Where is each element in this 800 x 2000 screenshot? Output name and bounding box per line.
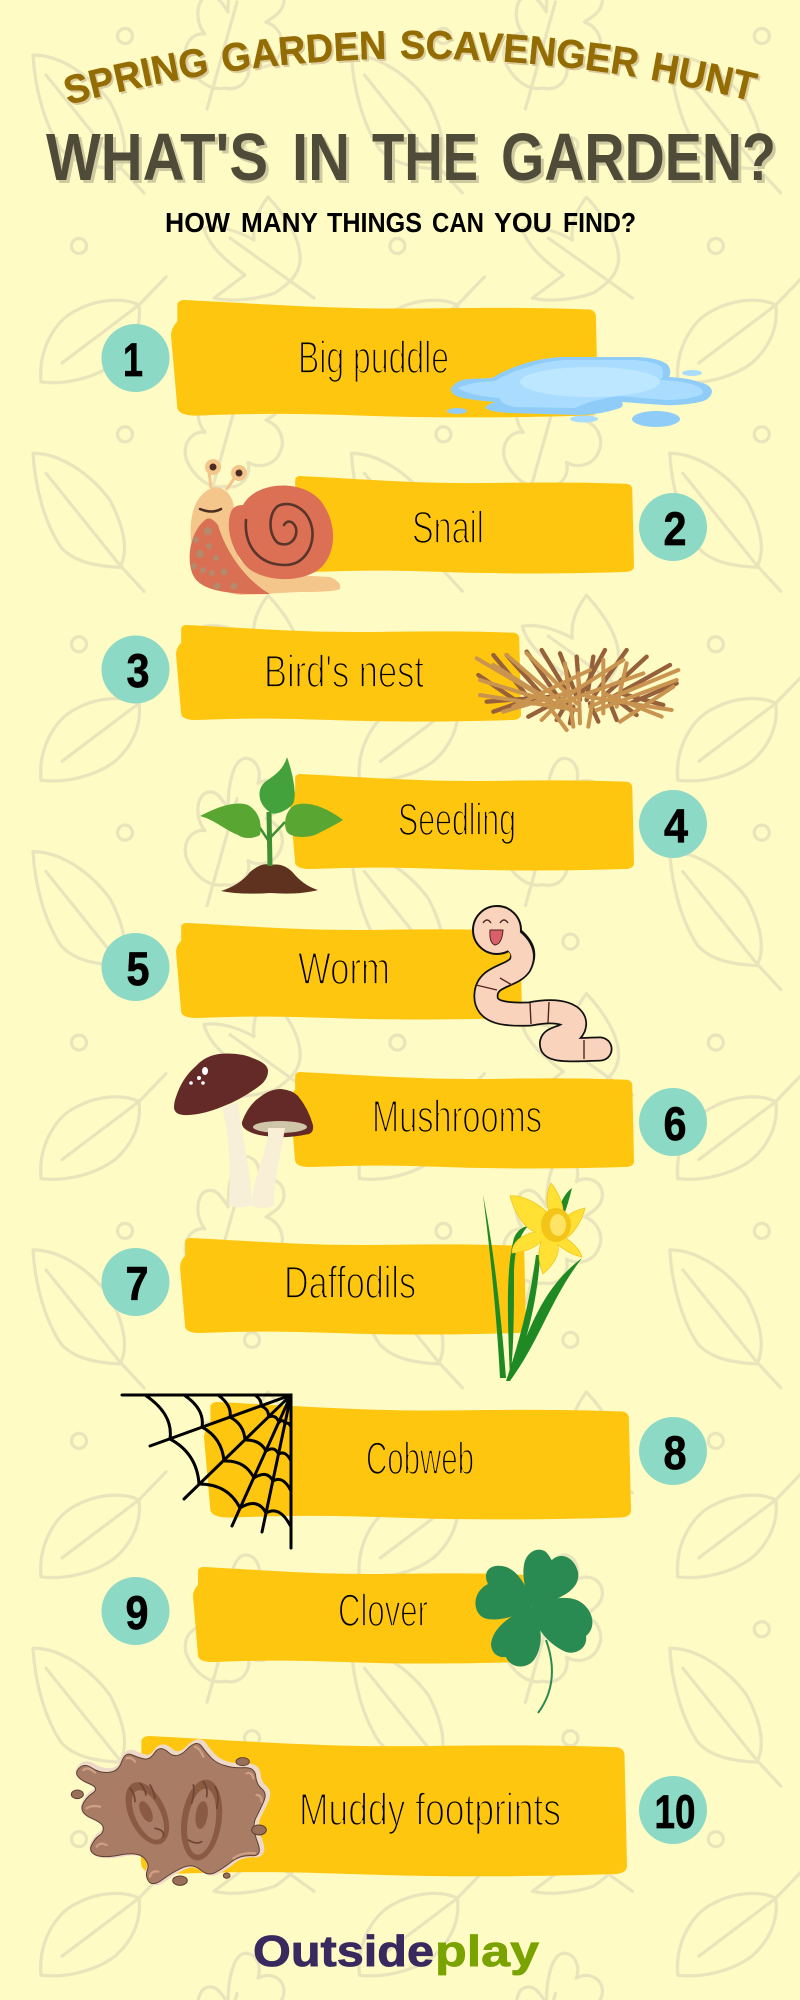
main heading [46,120,776,195]
number badge 2 [639,493,707,561]
number badge 10: 10 [654,1785,696,1838]
icon: mud with footprints [71,1742,267,1885]
label text: Seedling [398,794,516,845]
number badge 6 [639,1088,707,1156]
number badge 10 [639,1776,707,1844]
label text: Worm [298,943,390,994]
label bar [204,1402,631,1519]
label bar [134,1736,627,1876]
number badge 5: 5 [126,942,150,995]
label bar [193,1567,530,1664]
subheading [165,207,636,238]
label text: Muddy footprints [299,1784,561,1835]
label text: Cobweb [366,1433,474,1484]
subheading: THINGS [327,207,422,238]
icon: clover [475,1550,592,1713]
number badge 1: 1 [123,333,143,386]
label text: Daffodils [284,1257,416,1308]
number badge 9: 9 [126,1586,148,1639]
icon: puddle [447,357,712,427]
number badge 9 [102,1577,170,1645]
number badge 3: 3 [126,644,150,697]
label text: Mushrooms [372,1091,542,1142]
label bar [176,625,521,722]
item 5: worm [102,906,600,1059]
item 9: clover [102,1550,592,1713]
label bar [180,1238,526,1335]
subheading: HOW [165,207,231,238]
item 3: bird's nest [102,625,678,730]
number badge 7: 7 [126,1257,148,1310]
label bar [176,923,522,1020]
number badge 3 [102,636,170,704]
icon: nest [477,650,678,730]
number badge 5 [102,933,170,1001]
number badge 2: 2 [664,502,686,555]
item 4: seedling [200,757,707,894]
number badge 8 [639,1417,707,1485]
label bar [290,476,634,574]
number badge 4 [639,790,707,858]
logo: Outsideplay [253,1927,540,1976]
logo: Outsideplay: Outside [253,1927,434,1976]
subheading: CAN [432,207,484,238]
label bar [290,1072,634,1169]
main heading: WHAT'S [46,120,268,195]
icon: worm [473,906,600,1059]
subheading: MANY [241,207,318,238]
label bar [171,300,598,417]
item 8: cobweb [122,1395,707,1548]
item 2: snail [190,459,707,595]
icon: daffodil [483,1183,585,1381]
logo: Outsideplay: play [435,1927,540,1976]
main heading: IN [292,120,350,195]
icon: cobweb [122,1395,291,1548]
item 7: daffodils [102,1183,585,1381]
item 1: big puddle [102,300,712,427]
label text: Big puddle [298,332,449,383]
label bar [290,774,634,871]
item 6: mushrooms [174,1054,707,1208]
label text: Clover [338,1585,428,1636]
subheading: FIND? [563,207,636,238]
number badge 4: 4 [664,799,688,852]
label text: Snail [412,502,484,553]
number badge 1 [102,324,170,392]
number badge 8: 8 [664,1426,686,1479]
label text: Bird's nest [264,646,424,697]
subheading: YOU [494,207,552,238]
main heading: THE [372,120,478,195]
number badge 7 [102,1248,170,1316]
number badge 6: 6 [664,1097,686,1150]
icon: mushrooms [174,1054,313,1208]
curved title: SPRING GARDEN SCAVENGER HUNT [64,30,760,105]
item 10: muddy footprints [71,1736,707,1885]
icon: snail [190,459,340,595]
icon: seedling [200,757,343,894]
